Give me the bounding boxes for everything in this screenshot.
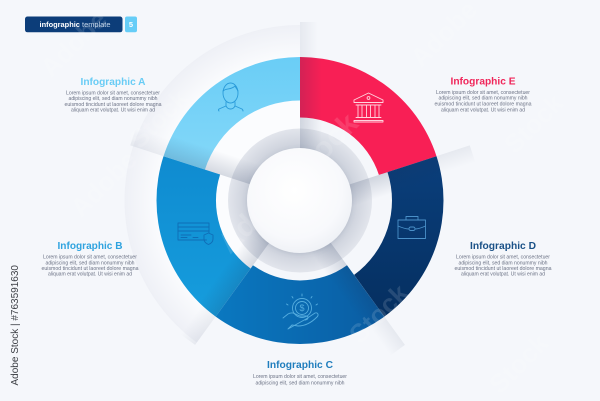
text block: Infographic C: Infographic C: [267, 359, 333, 371]
text block: Infographic D: adipiscing elit, sed diam nonummy nibh: [458, 260, 548, 266]
text block: Infographic A: aliquam erat volutpat. Ut wisi enim ad: [71, 108, 155, 114]
segment B: [157, 156, 251, 317]
text block: Infographic E: Lorem ipsum dolor sit amet, consectetuer: [436, 90, 530, 96]
text block: Infographic A: Lorem ipsum dolor sit amet, consectetuer: [66, 90, 160, 96]
header text: infographic template: [40, 20, 110, 29]
text block: Infographic D: Infographic D: [470, 240, 536, 252]
edge shadows: [164, 57, 443, 330]
stock watermarks: Adobe Stock: [212, 107, 365, 260]
text block: Infographic E: aliquam erat volutpat. Ut wisi enim ad: [441, 108, 525, 114]
text block: Infographic E: euismod tincidunt ut laoreet dolore magna: [434, 102, 532, 108]
segment A: [164, 57, 300, 170]
icon: person: [219, 83, 243, 111]
text block: Infographic B: aliquam erat volutpat. Ut wisi enim ad: [48, 272, 132, 278]
text block: Infographic E: Infographic E: [450, 76, 516, 88]
icon: hand with coin: [283, 294, 318, 329]
donut chart: [157, 57, 444, 344]
text block: Infographic A: [64, 76, 162, 114]
text block: Infographic C: adipiscing elit, sed diam nonummy nibh: [256, 380, 345, 386]
text block: Infographic C: Lorem ipsum dolor sit amet, consectetuer: [253, 374, 347, 380]
icon: bank: [354, 93, 383, 122]
segment C: [216, 265, 384, 344]
segment D: [354, 156, 444, 317]
stock watermarks: Adobe: [64, 144, 143, 223]
stock watermarks: Stock: [343, 278, 415, 349]
text block: Infographic E: [434, 76, 532, 114]
header number badge: 5: [129, 20, 133, 29]
text block: Infographic E: adipiscing elit, sed diam nonummy nibh: [438, 96, 528, 102]
text block: Infographic A: Infographic A: [80, 76, 146, 88]
text block: Infographic B: Infographic B: [58, 240, 123, 252]
stock watermarks: Stock: [483, 328, 555, 399]
icon: hand with coin: $: [299, 303, 305, 313]
header pill: [25, 16, 122, 32]
outer halo sectors: [125, 22, 475, 355]
text block: Infographic D: aliquam erat volutpat. Ut wisi enim ad: [461, 272, 545, 278]
text block: Infographic C: [253, 359, 347, 386]
text block: Infographic B: adipiscing elit, sed diam nonummy nibh: [46, 260, 135, 266]
text block: Infographic B: euismod tincidunt ut laoreet dolore magna: [42, 266, 139, 272]
inner grey ring: [228, 128, 372, 272]
stock watermarks: Stock: [123, 83, 195, 154]
text block: Infographic B: [42, 240, 139, 278]
stock watermarks: Stock: [498, 88, 570, 159]
vertical stock id: Adobe Stock | #763591630: [10, 265, 21, 385]
icon: briefcase: [398, 216, 426, 238]
segment E: [300, 57, 436, 175]
text block: Infographic B: Lorem ipsum dolor sit amet, consectetuer: [43, 254, 137, 260]
icon: credit card with shield: [178, 223, 213, 244]
text block: Infographic D: euismod tincidunt ut laoreet dolore magna: [454, 266, 552, 272]
stock watermarks: Adobe: [34, 4, 113, 83]
header label: [25, 16, 122, 32]
text block: Infographic D: Lorem ipsum dolor sit amet, consectetuer: [456, 254, 550, 260]
text block: Infographic D: [454, 240, 552, 278]
text block: Infographic A: adipiscing elit, sed diam nonummy nibh: [68, 96, 158, 102]
text block: Infographic A: euismod tincidunt ut laoreet dolore magna: [64, 102, 162, 108]
header number badge: [125, 16, 137, 32]
center circle: [247, 148, 352, 253]
